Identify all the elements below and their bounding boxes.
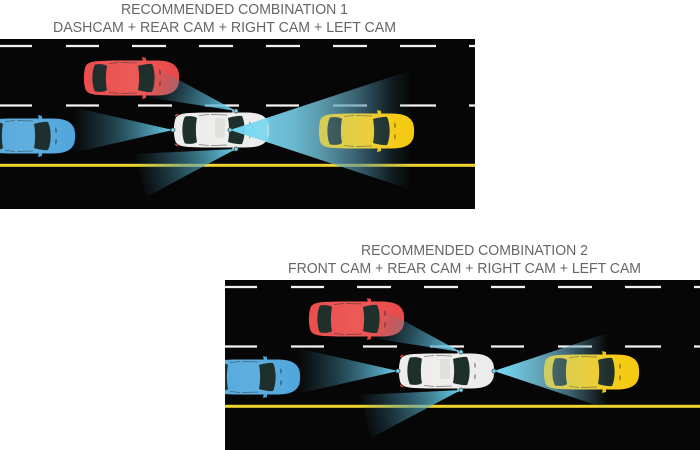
beam: left camera	[135, 149, 236, 197]
heading: recommended combination 1: RECOMMENDED COMBINATION 1	[121, 1, 348, 18]
car: red	[309, 298, 404, 340]
car: white	[399, 350, 494, 392]
beam: rear camera	[302, 350, 396, 392]
heading: recommended combination 1	[53, 1, 396, 36]
heading: recommended combination 2: RECOMMENDED COMBINATION 2	[361, 242, 588, 259]
panel: road scene combination 1	[0, 39, 475, 209]
car: white	[174, 109, 269, 151]
beam: front camera overlay on cars	[496, 336, 602, 406]
car: red	[84, 57, 179, 99]
panel: road scene combination 2	[205, 280, 700, 450]
white car details	[400, 355, 450, 387]
camera markers	[396, 350, 496, 392]
beam: left camera	[360, 390, 461, 438]
car: blue	[0, 115, 75, 157]
heading: recommended combination 2: FRONT CAM + REAR CAM + RIGHT CAM + LEFT CAM	[288, 260, 641, 277]
beam: front camera	[494, 333, 608, 409]
beam: right camera	[376, 310, 459, 352]
camera markers	[171, 109, 238, 151]
heading: recommended combination 1: DASHCAM + REAR CAM + RIGHT CAM + LEFT CAM	[53, 19, 396, 36]
beam: dashcam	[266, 72, 408, 188]
beam: right camera	[150, 70, 234, 111]
heading: recommended combination 2	[288, 242, 641, 277]
beam: rear camera	[78, 108, 171, 152]
white car details	[175, 114, 225, 146]
car: blue	[225, 356, 300, 398]
car: yellow	[319, 110, 414, 152]
beam: dashcam overlay on cars	[232, 80, 385, 180]
car: yellow	[544, 351, 639, 393]
